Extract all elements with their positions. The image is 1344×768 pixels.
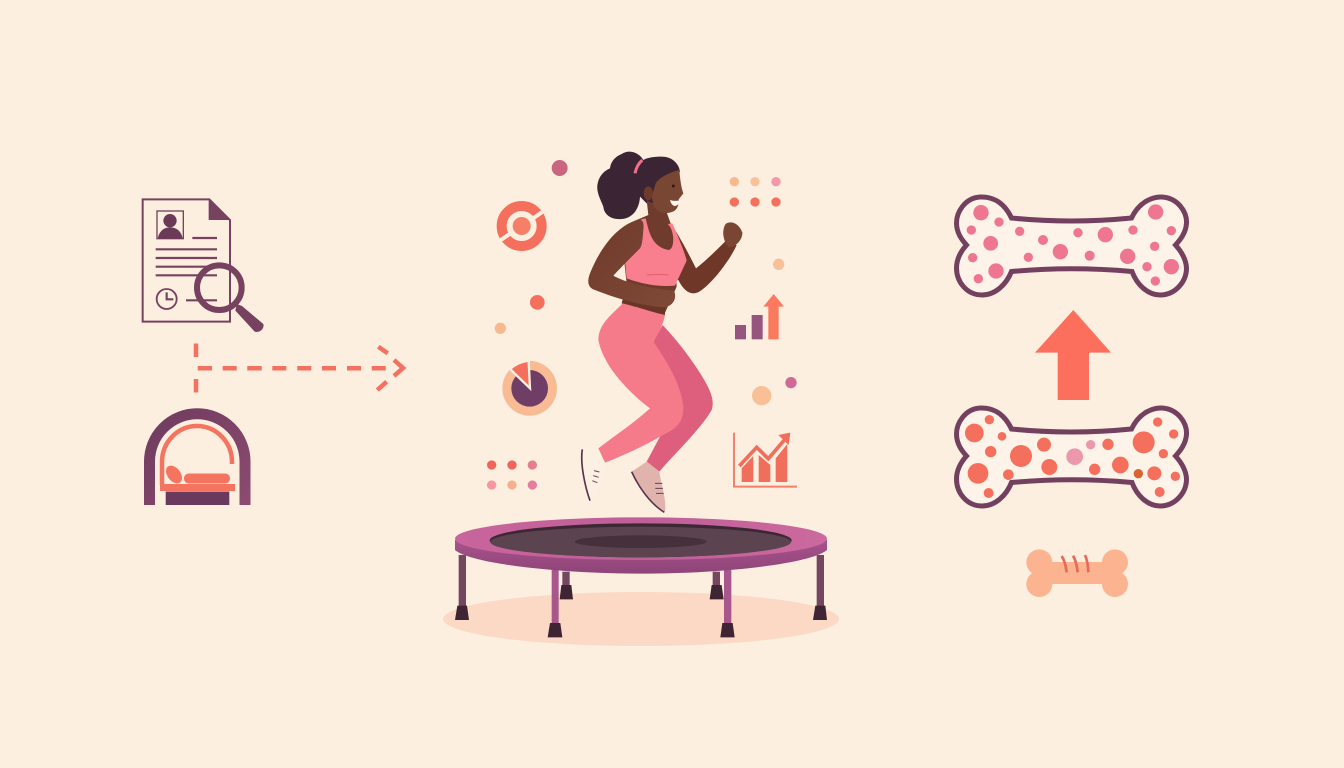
face [652, 170, 683, 213]
trampoline [455, 517, 827, 637]
up arrow [1035, 310, 1111, 400]
trampoline shadow [443, 592, 839, 646]
top bone: dense pink dots [956, 197, 1187, 295]
back leg [647, 325, 713, 472]
icon: pie chart [502, 361, 557, 416]
far arm [672, 225, 737, 293]
hair tie [635, 160, 642, 173]
smile [670, 200, 681, 206]
icon: medical record with magnifier [143, 199, 264, 332]
icon: MRI scanner [150, 414, 245, 505]
small bone with fracture marks [1026, 549, 1128, 597]
woman jumping [582, 152, 742, 512]
ear [644, 186, 653, 200]
front leg [598, 303, 683, 463]
near arm [588, 220, 675, 307]
icon: growth chart [734, 433, 797, 487]
front shoe [632, 462, 665, 512]
connector: dashed arrow [196, 344, 403, 392]
jumping mat [490, 523, 792, 557]
midriff [622, 297, 665, 315]
icon: bars with up arrow [735, 294, 784, 339]
rear shoe [582, 448, 605, 501]
rim [455, 517, 827, 574]
pink crop top [625, 218, 687, 286]
front legs [548, 570, 735, 637]
ponytail hair [597, 152, 680, 219]
top crease [647, 273, 668, 276]
floating dots [487, 160, 797, 490]
torso and neck skin [622, 200, 677, 315]
eye [672, 184, 675, 187]
fist [723, 222, 742, 247]
middle bone: orange dots [956, 408, 1187, 506]
icon: target ring [498, 206, 546, 246]
back legs [455, 555, 827, 620]
